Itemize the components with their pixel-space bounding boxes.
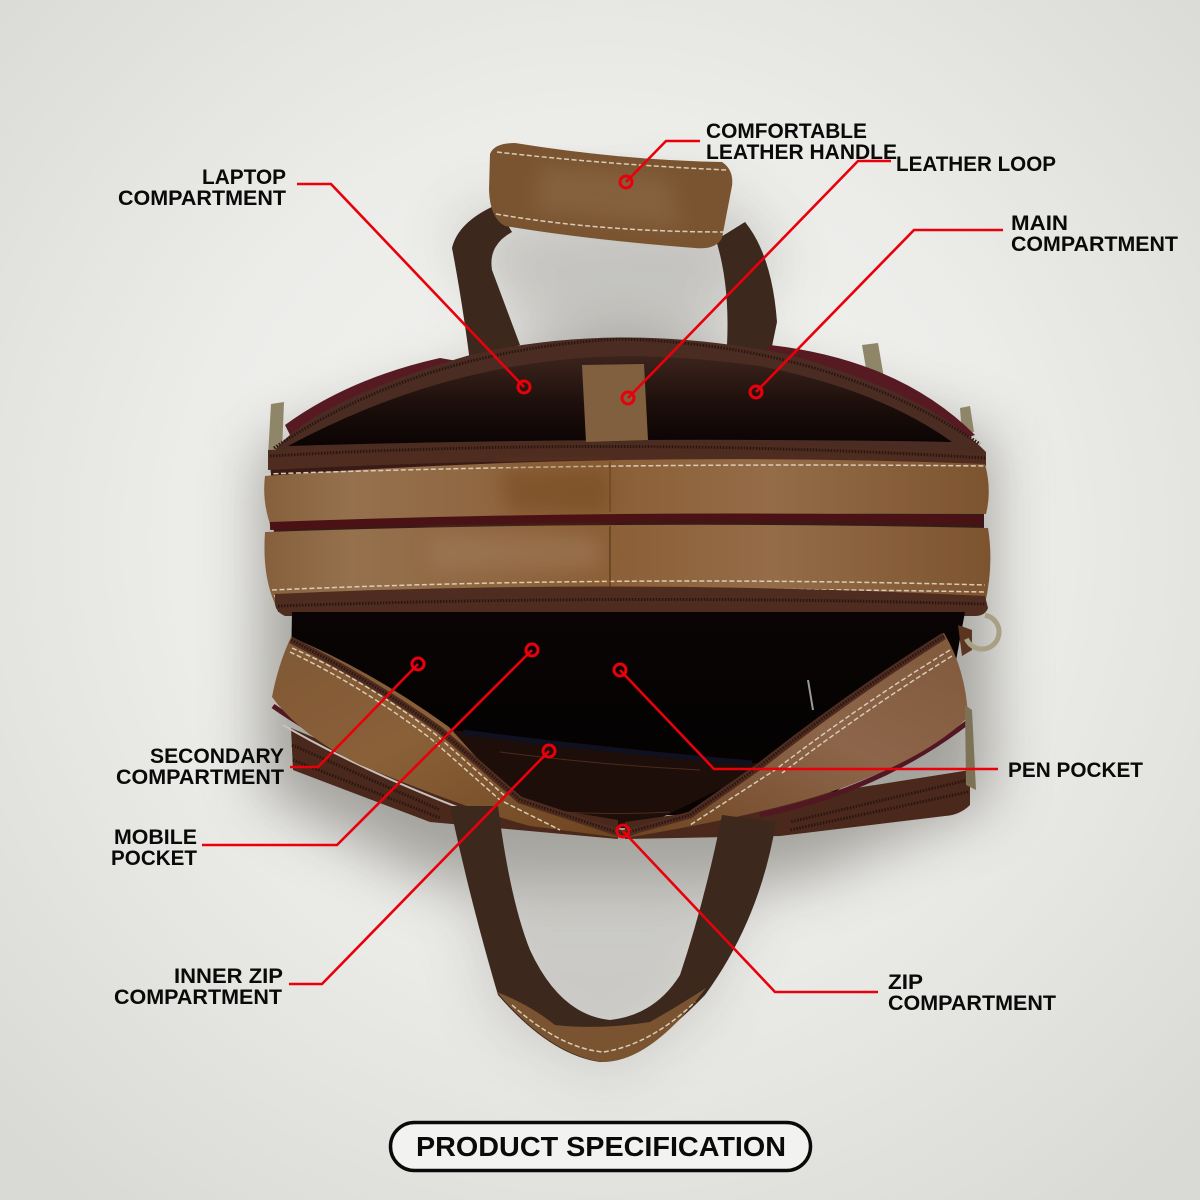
callout: secondary compartment: COMPARTMENT bbox=[116, 765, 284, 789]
side tabs bbox=[268, 343, 974, 456]
callout: secondary compartment bbox=[116, 658, 424, 789]
callout: inner zip compartment: COMPARTMENT bbox=[114, 985, 282, 1009]
callout: laptop compartment: LAPTOP bbox=[202, 165, 286, 189]
callout: inner zip compartment bbox=[114, 745, 555, 1009]
callout: mobile pocket: POCKET bbox=[111, 846, 197, 870]
top leather handle bbox=[489, 143, 732, 248]
lower leather band bbox=[264, 525, 990, 604]
callout: main compartment bbox=[750, 211, 1178, 398]
upper leather band bbox=[264, 459, 989, 524]
right hardware bbox=[965, 705, 976, 790]
zip lower bbox=[275, 586, 988, 616]
lower opening bbox=[290, 612, 965, 815]
callout: main compartment: MAIN bbox=[1011, 211, 1068, 235]
callout: comfortable leather handle: LEATHER HANDLE bbox=[706, 140, 897, 164]
zip upper bbox=[268, 443, 986, 470]
footer badge: product specification bbox=[390, 1122, 810, 1170]
callout: mobile pocket: MOBILE bbox=[114, 825, 197, 849]
callout: laptop compartment: COMPARTMENT bbox=[118, 186, 286, 210]
bag shadow bbox=[262, 190, 990, 1070]
callout: comfortable leather handle: COMFORTABLE bbox=[706, 119, 867, 143]
top strap bbox=[452, 205, 777, 362]
bottom strap bbox=[450, 806, 776, 1062]
callout: pen pocket: PEN POCKET bbox=[1008, 758, 1143, 782]
maroon piping bbox=[270, 518, 982, 526]
bag illustration bbox=[264, 143, 1002, 1062]
maroon side panels bbox=[285, 345, 975, 440]
band backing bbox=[270, 458, 984, 612]
callout: leather loop bbox=[622, 152, 1056, 404]
callout: pen pocket bbox=[614, 664, 1143, 782]
callout: inner zip compartment: INNER ZIP bbox=[174, 964, 283, 988]
callout: zip compartment: COMPARTMENT bbox=[888, 991, 1056, 1015]
callout: secondary compartment: SECONDARY bbox=[150, 744, 284, 768]
callout: mobile pocket bbox=[111, 644, 538, 870]
left flap bbox=[272, 637, 622, 838]
right flap bbox=[622, 633, 968, 838]
callout: leather loop: LEATHER LOOP bbox=[896, 152, 1056, 176]
callout: laptop compartment bbox=[118, 165, 530, 393]
callout: comfortable leather handle bbox=[620, 119, 897, 188]
maroon flap piping bbox=[273, 706, 968, 815]
pin bbox=[808, 680, 813, 710]
side ring bbox=[958, 612, 1002, 656]
lower left body layers bbox=[291, 728, 618, 839]
callout: zip compartment: ZIP bbox=[888, 970, 923, 994]
footer badge: product specification: PRODUCT SPECIFICATION bbox=[416, 1131, 786, 1162]
upper opening bbox=[268, 338, 986, 462]
inner zip pocket bbox=[450, 730, 770, 828]
lower right body layers bbox=[625, 770, 970, 839]
callout: main compartment: COMPARTMENT bbox=[1011, 232, 1178, 256]
callout: zip compartment bbox=[617, 825, 1056, 1015]
